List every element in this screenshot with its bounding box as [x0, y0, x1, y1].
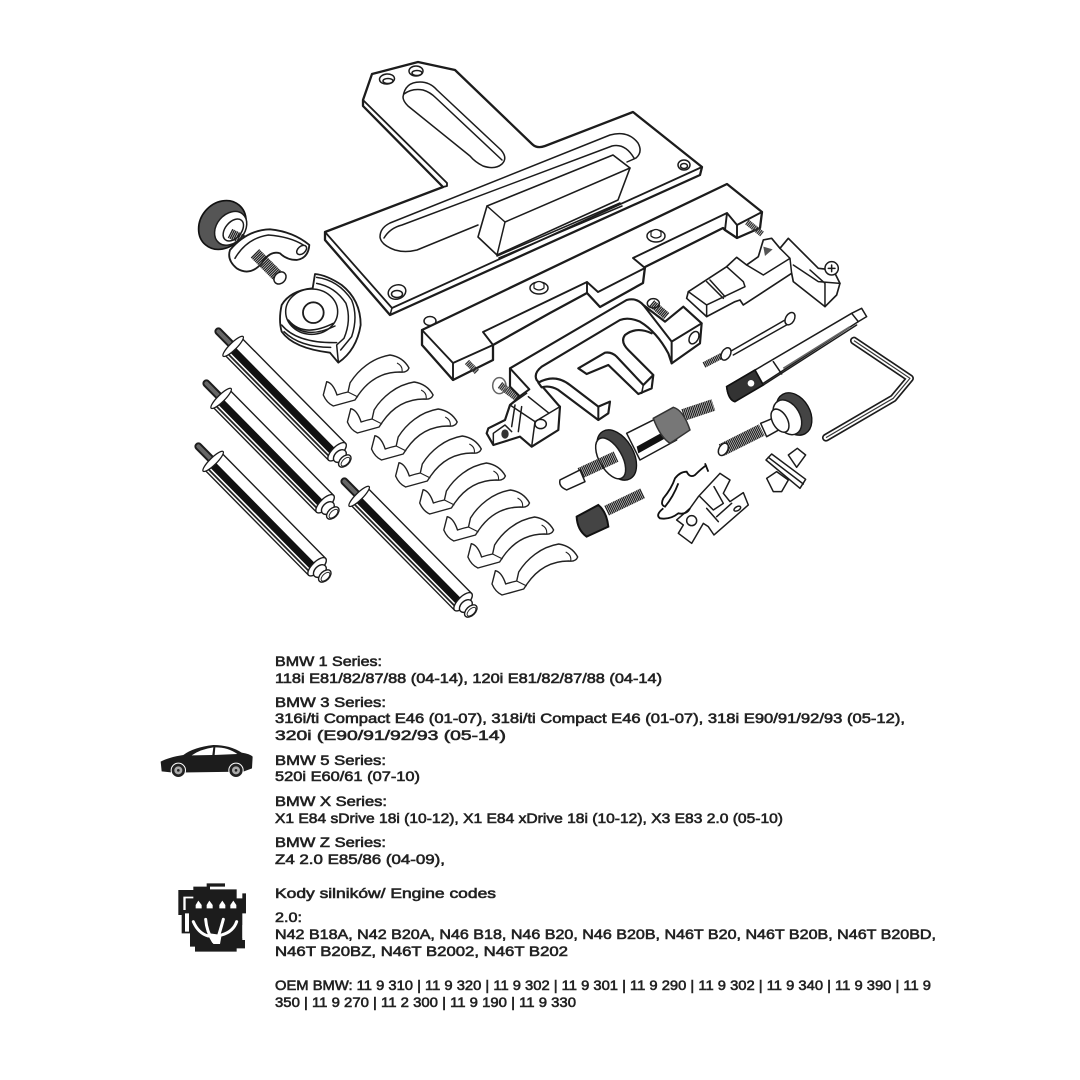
OEM numbers: OEM BMW: 11 9 310 | 11 9 320 | 11 9 302 | 11 9 301 | 11 9 290 | 11 9 302 | 11 9 340 | 11 9 390 | 11 9: [275, 977, 931, 993]
vehicle list: BMW 5 Series: BMW 5 Series:: [275, 752, 386, 768]
hex wrench: [826, 341, 910, 438]
engine codes list: N46T B20BZ, N46T B2002, N46T B202: [275, 943, 568, 959]
support rod 2: [196, 374, 347, 525]
icon: engine: [178, 883, 246, 952]
vehicle list: BMW 3 Series: 320i (E90/91/92/93 (05-14): [275, 727, 506, 743]
icon: car: [161, 745, 253, 778]
engine codes list: N42 B18A, N42 B20A, N46 B18, N46 B20, N46 B20B, N46T B20, N46T B20B, N46T B20BD,: [275, 926, 936, 942]
yoke crankshaft tool: [487, 299, 702, 447]
plate bolt holes: [379, 73, 395, 85]
bearing half shells: [323, 355, 578, 595]
OEM numbers: 350 | 11 9 270 | 11 2 300 | 11 9 190 | 11 9 330: [275, 994, 576, 1010]
support rod 3: [188, 437, 339, 588]
raised block on plate: [478, 155, 630, 255]
knurled locking pin: [727, 308, 867, 402]
small hex bolt: [704, 311, 797, 365]
round cam guide: [280, 274, 361, 363]
engine codes list: [275, 909, 936, 959]
support rod 1: [208, 322, 359, 473]
flanged adapter: [766, 448, 806, 492]
illustration: timing tool kit parts: [188, 62, 910, 623]
vehicle list: BMW 1 Series: BMW 1 Series:: [275, 653, 382, 669]
vehicle list: BMW Z Series: BMW Z Series:: [275, 834, 386, 850]
vehicle list: BMW 3 Series: [275, 694, 905, 743]
vehicle list: BMW X Series: X1 E84 sDrive 18i (10-12), X1 E84 xDrive 18i (10-12), X3 E83 2.0 (05-10): [275, 810, 783, 826]
engine codes list: 2.0:: [275, 909, 302, 925]
plate slot horizontal: [380, 134, 640, 252]
vehicle list: BMW X Series: BMW X Series:: [275, 793, 387, 809]
chain with bracket: [658, 463, 748, 543]
main locking plate: [325, 62, 702, 315]
vehicle list: BMW 1 Series: [275, 653, 662, 686]
vehicle list: BMW X Series: [275, 793, 783, 826]
vehicle list: BMW 3 Series: 316i/ti Compact E46 (01-07), 318i/ti Compact E46 (01-07), 318i E90/91/92/93 (05-12),: [275, 710, 905, 726]
plate slot vertical: [403, 82, 505, 168]
yoke right hooked finger: [578, 330, 653, 394]
thumb screw right: [716, 386, 819, 457]
engine codes heading: Kody silników/ Engine codes: [275, 885, 496, 901]
vehicle list: BMW 5 Series: [275, 752, 420, 784]
vehicle list: BMW Z Series: Z4 2.0 E85/86 (04-09),: [275, 851, 445, 867]
timing latch bracket: [687, 238, 840, 317]
vehicle list: BMW 5 Series: 520i E60/61 (07-10): [275, 768, 420, 784]
support rod 4: [334, 472, 485, 623]
yoke left finger: [538, 379, 610, 420]
yoke left block: [510, 393, 560, 447]
vehicle list: BMW Z Series: [275, 834, 445, 867]
bar studs: [530, 282, 548, 294]
puller spindle: [560, 405, 713, 490]
camshaft alignment bar: [422, 184, 762, 380]
OEM numbers: [275, 977, 931, 1010]
vehicle list: BMW 3 Series: BMW 3 Series:: [275, 694, 386, 710]
knob bolt: [577, 493, 643, 537]
thumb screw clamp: [189, 191, 309, 286]
vehicle list: BMW 1 Series: 118i E81/82/87/88 (04-14), 120i E81/82/87/88 (04-14): [275, 670, 662, 686]
